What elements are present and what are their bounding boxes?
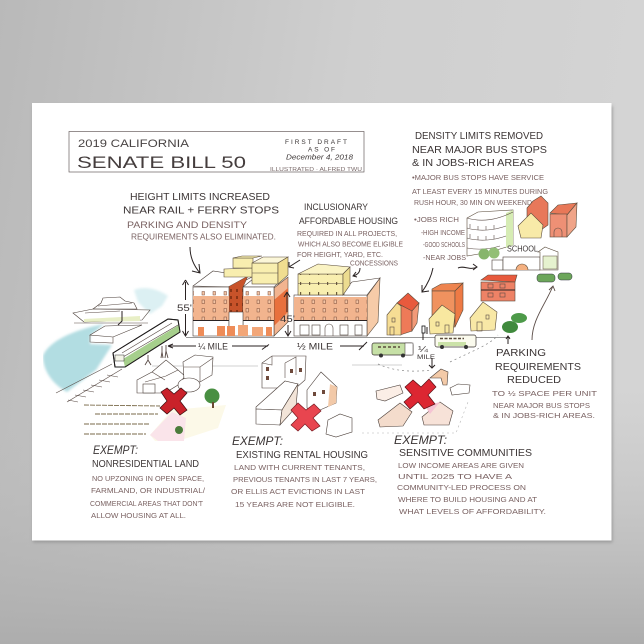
heading: parking requirements reduced: PARKING: [496, 347, 546, 359]
heading: parking requirements reduced: & IN JOBS-RICH AREAS.: [493, 411, 595, 420]
ground line and mile markers: [152, 335, 510, 371]
heading: density limits removed: •JOBS RICH: [414, 215, 459, 224]
heading: inclusionary affordable housing: FOR HEIGHT, YARD, ETC.: [297, 252, 383, 259]
heading: density limits removed: -NEAR JOBS: [423, 253, 466, 262]
upper floors: yellow additions on block: [224, 256, 288, 284]
heading: parking requirements reduced: TO ½ SPACE PER UNIT: [492, 389, 598, 398]
text: exempt nonresidential land: EXEMPT:: [93, 443, 138, 457]
heading: density limits removed: & IN JOBS-RICH AREAS: [412, 158, 534, 169]
title box: AS OF: [308, 146, 335, 154]
illustration: existing rental housing: [256, 356, 352, 437]
heading: parking requirements reduced: NEAR MAJOR BUS STOPS: [493, 401, 590, 410]
text: exempt existing rental housing: 15 YEARS ARE NOT ELIGIBLE.: [235, 500, 355, 509]
icon: red X sensitive: [404, 379, 436, 409]
poster sheet: [32, 103, 612, 540]
trees: [478, 248, 500, 260]
heading: height limits: REQUIREMENTS ALSO ELIMINATED.: [131, 232, 276, 242]
text: exempt existing rental housing: EXEMPT:: [232, 434, 283, 448]
pedestrians: [145, 345, 168, 365]
heading: height limits: [123, 192, 279, 242]
text: exempt sensitive communities: SENSITIVE COMMUNITIES: [399, 448, 532, 459]
illustration: nonresidential land: [84, 355, 226, 441]
heading: parking requirements reduced: [492, 347, 598, 420]
heading: density limits removed: •MAJOR BUS STOPS HAVE SERVICE: [412, 173, 544, 182]
heading: parking requirements reduced: REQUIREMENTS: [495, 361, 581, 373]
ground line and mile markers: ¼: [418, 345, 428, 354]
illustration: sensitive communities: [362, 369, 470, 433]
heading: density limits removed: AT LEAST EVERY 15 MINUTES DURING: [412, 187, 548, 196]
school: [492, 244, 558, 270]
pier: [90, 325, 142, 343]
ground line and mile markers: ¼ MILE: [198, 342, 228, 352]
text: exempt existing rental housing: EXISTING RENTAL HOUSING: [236, 450, 368, 461]
arrows: [190, 247, 555, 368]
houses near school: [518, 196, 577, 238]
text: exempt sensitive communities: WHAT LEVELS OF AFFORDABILITY.: [399, 507, 546, 516]
dimension 55 feet: 55': [177, 303, 192, 313]
heading: height limits: NEAR RAIL + FERRY STOPS: [123, 206, 279, 216]
ferry: [73, 297, 150, 325]
text: exempt sensitive communities: UNTIL 2025 TO HAVE A: [398, 472, 512, 481]
rail tracks: [56, 364, 122, 402]
heading: inclusionary affordable housing: AFFORDABLE HOUSING: [299, 216, 398, 226]
bus left: [372, 343, 413, 358]
water: [43, 288, 168, 392]
building: inclusionary apartment: [294, 278, 380, 336]
heading: inclusionary affordable housing: INCLUSIONARY: [304, 202, 368, 212]
heading: density limits removed: -HIGH INCOME: [421, 228, 465, 237]
heading: inclusionary affordable housing: [297, 202, 403, 268]
text: exempt sensitive communities: COMMUNITY-LED PROCESS ON: [397, 483, 526, 492]
title box: [69, 132, 364, 173]
house group: jobs-rich row: [387, 275, 517, 335]
train: [113, 319, 180, 367]
text: exempt existing rental housing: OR ELLIS ACT EVICTIONS IN LAST: [231, 487, 365, 496]
heading: height limits: PARKING AND DENSITY: [127, 220, 247, 230]
heading: inclusionary affordable housing: REQUIRED IN ALL PROJECTS,: [297, 231, 397, 238]
dimension 45 feet: [280, 292, 295, 336]
heading: inclusionary affordable housing: WHICH ALSO BECOME ELIGIBLE: [298, 242, 403, 248]
icon: red X nonresidential: [160, 388, 187, 415]
icon: bush: [502, 313, 527, 333]
title box: FIRST DRAFT: [285, 139, 347, 146]
icon: bus stop sign: [422, 326, 427, 340]
text: exempt nonresidential land: NONRESIDENTIAL LAND: [92, 459, 199, 470]
title box: 2019 CALIFORNIA: [78, 138, 190, 150]
text: exempt nonresidential land: NO UPZONING IN OPEN SPACE,: [92, 474, 204, 483]
text: exempt sensitive communities: [394, 433, 546, 516]
text: exempt sensitive communities: LOW INCOME AREAS ARE GIVEN: [398, 461, 524, 470]
school: SCHOOL: [507, 244, 538, 254]
heading: inclusionary affordable housing: CONCESSIONS: [350, 260, 398, 268]
heading: density limits removed: RUSH HOUR, 30 MIN ON WEEKEND: [414, 198, 533, 207]
office tower: [467, 210, 513, 256]
text: exempt existing rental housing: [231, 434, 377, 509]
poster shadow: [33, 106, 612, 542]
heading: parking requirements reduced: REDUCED: [507, 374, 561, 386]
text: exempt nonresidential land: COMMERCIAL AREAS THAT DON'T: [90, 499, 203, 508]
dimension 45 feet: 45': [280, 314, 295, 324]
title box: December 4, 2018: [286, 154, 353, 162]
title box: SENATE BILL 50: [77, 153, 246, 172]
title box: ILLUSTRATED · ALFRED TWU: [270, 167, 363, 173]
text: exempt sensitive communities: EXEMPT:: [394, 433, 447, 447]
icon: red X rental: [291, 403, 321, 431]
text: exempt nonresidential land: ALLOW HOUSING AT ALL.: [91, 511, 186, 520]
heading: height limits: HEIGHT LIMITS INCREASED: [130, 192, 270, 203]
ground line and mile markers: MILE: [417, 354, 436, 361]
building: rail-adjacent tall block: [193, 271, 288, 336]
upper floors: yellow additions on apartment: [298, 264, 350, 295]
heading: density limits removed: NEAR MAJOR BUS STOPS: [412, 145, 547, 156]
heading: density limits removed: DENSITY LIMITS REMOVED: [415, 131, 543, 142]
text: exempt existing rental housing: LAND WITH CURRENT TENANTS,: [234, 463, 365, 472]
heading: density limits removed: [412, 131, 548, 262]
text: exempt nonresidential land: [90, 443, 206, 520]
text: exempt nonresidential land: FARMLAND, OR INDUSTRIAL/: [91, 486, 206, 495]
ground line and mile markers: ½ MILE: [297, 342, 333, 352]
poster artwork: [43, 131, 598, 520]
text: exempt existing rental housing: PREVIOUS TENANTS IN LAST 7 YEARS,: [233, 475, 377, 484]
heading: density limits removed: -GOOD SCHOOLS: [423, 240, 465, 249]
bus right: [435, 335, 476, 349]
dimension 55 feet: [177, 280, 192, 336]
text: exempt sensitive communities: WHERE TO BUILD HOUSING AND AT: [398, 495, 537, 504]
cars: [537, 273, 572, 282]
